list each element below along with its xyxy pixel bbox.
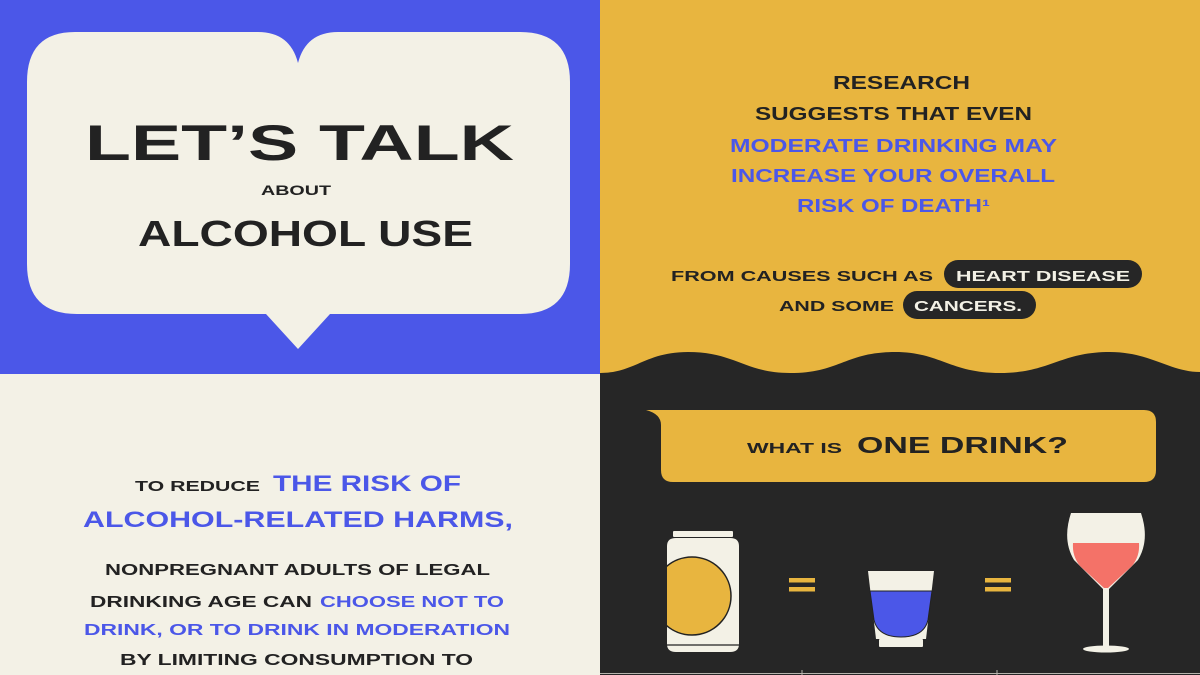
panel: one drink (dark) <box>600 410 1200 675</box>
panel: title (blue) <box>0 0 600 374</box>
heading text: THE RISK OF <box>273 471 461 496</box>
causes text: FROM CAUSES SUCH AS <box>671 268 933 285</box>
title text: LET’S TALK <box>85 115 514 171</box>
heading text <box>83 471 513 532</box>
title text: ABOUT <box>261 182 332 198</box>
highlighted text: INCREASE YOUR OVERALL <box>731 166 1055 186</box>
body text: DRINK, OR TO DRINK IN MODERATION <box>84 622 510 639</box>
causes text: AND SOME <box>779 298 894 315</box>
body text: DRINKING AGE CAN <box>90 594 312 611</box>
icon: shot glass <box>868 571 934 647</box>
bottom rule <box>600 670 1200 675</box>
title text: ALCOHOL USE <box>138 213 473 254</box>
body text: NONPREGNANT ADULTS OF LEGAL <box>105 562 490 579</box>
research text: SUGGESTS THAT EVEN <box>755 104 1032 124</box>
panel: research (yellow) <box>600 0 1200 373</box>
causes text: HEART DISEASE <box>956 268 1130 285</box>
research text <box>755 73 1032 124</box>
highlighted text <box>730 136 1057 216</box>
yellow question bubble: ONE DRINK? <box>857 432 1068 458</box>
icon: wine glass <box>1067 513 1145 652</box>
icon: beer can <box>667 531 739 652</box>
causes text: CANCERS. <box>914 298 1022 315</box>
research text: RESEARCH <box>833 73 970 93</box>
highlighted text: RISK OF DEATH¹ <box>797 196 990 216</box>
speech bubble <box>27 32 570 349</box>
yellow question bubble <box>646 410 1156 482</box>
heading text: ALCOHOL-RELATED HARMS, <box>83 507 513 532</box>
panel: recommendation (cream) <box>0 374 600 675</box>
title text <box>85 115 514 254</box>
body text: BY LIMITING CONSUMPTION TO <box>120 652 473 669</box>
causes text <box>671 260 1142 319</box>
body text: CHOOSE NOT TO <box>320 594 504 611</box>
icon: equals <box>985 578 1011 592</box>
body text <box>84 562 510 669</box>
yellow question bubble: WHAT IS <box>747 440 842 457</box>
highlighted text: MODERATE DRINKING MAY <box>730 136 1057 156</box>
heading text: TO REDUCE <box>135 478 260 495</box>
icon: equals <box>789 578 815 592</box>
